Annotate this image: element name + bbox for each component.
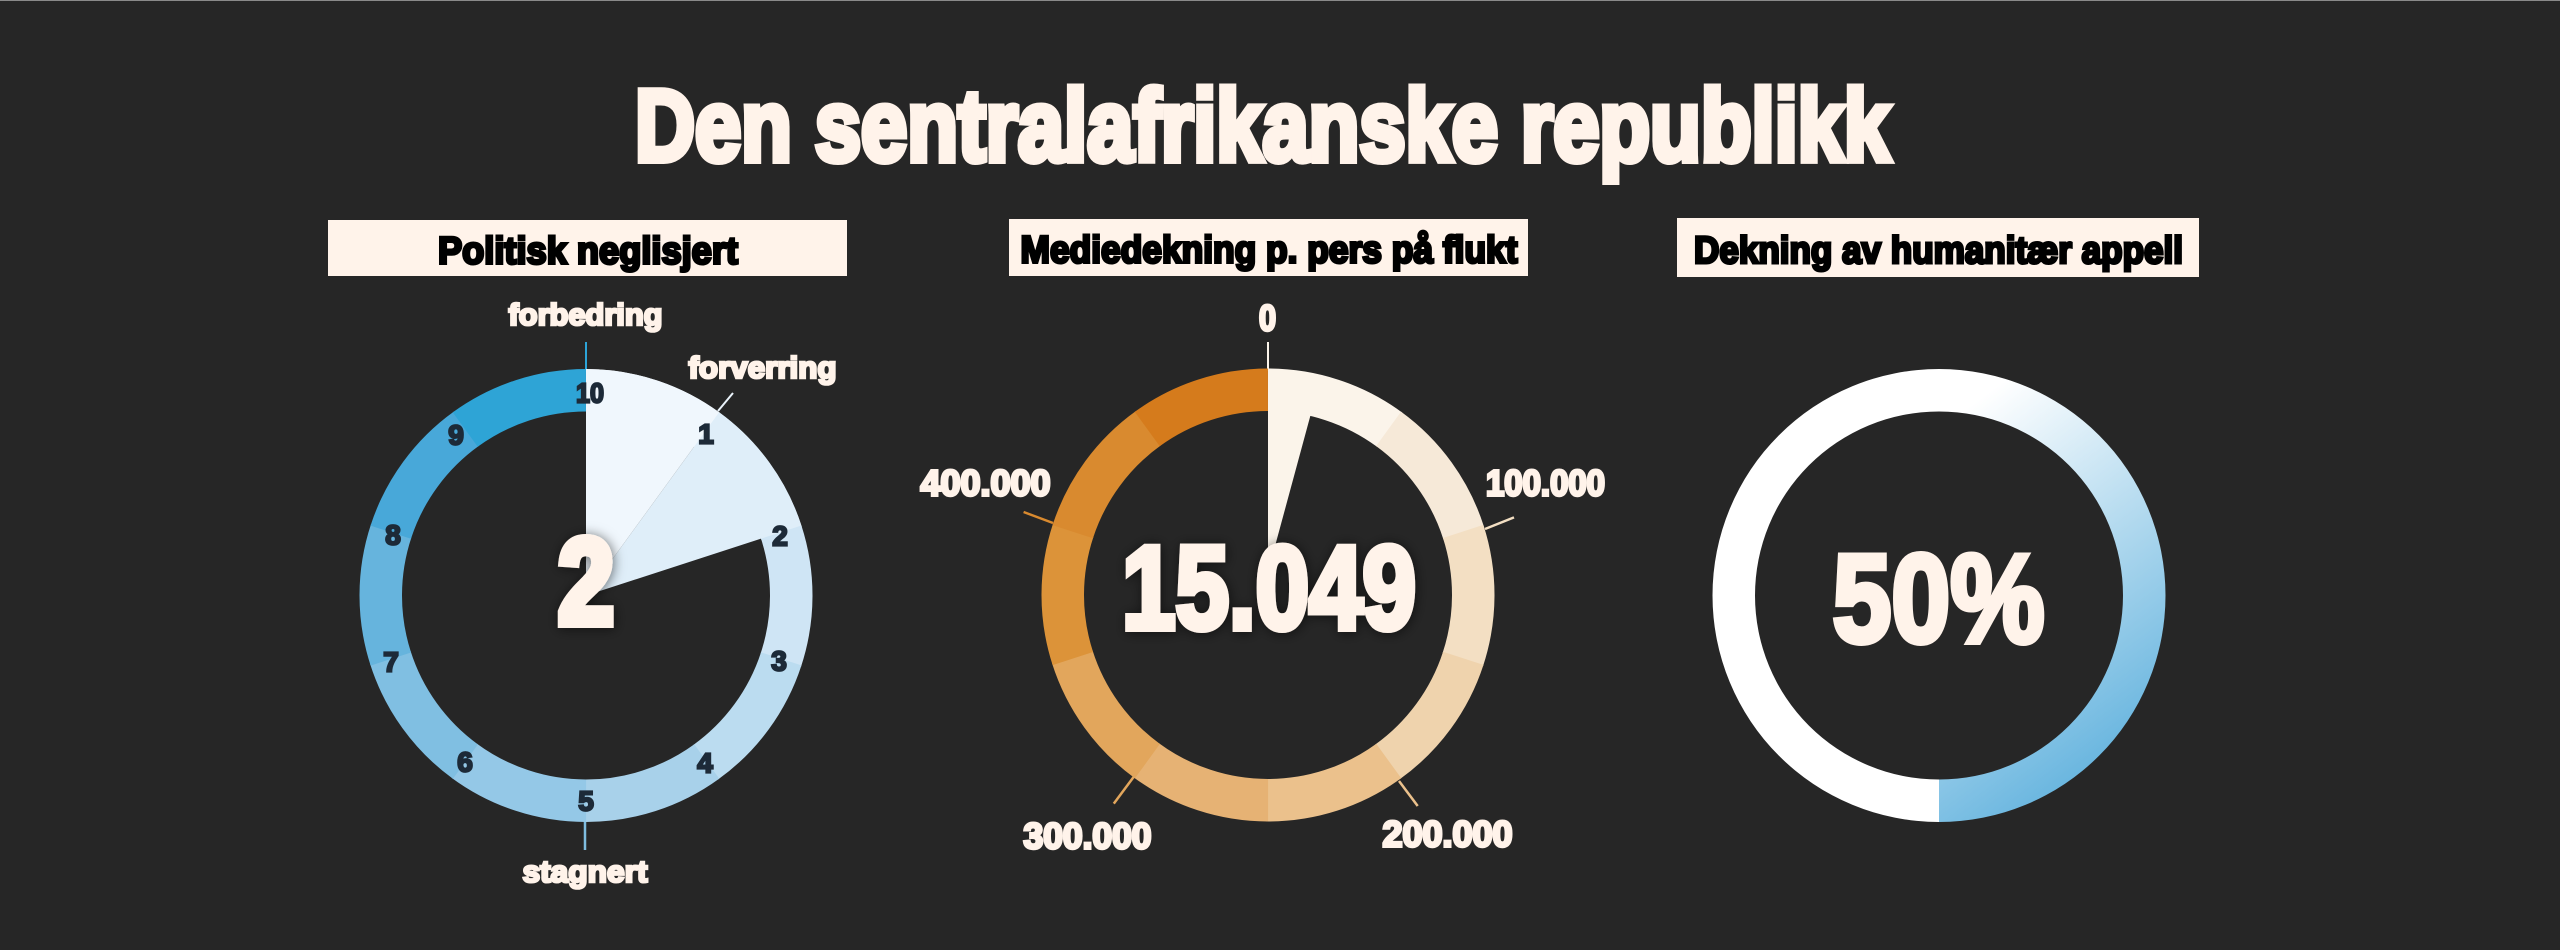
scale numbers: 1 <box>698 418 714 450</box>
donut chart: 50 percent <box>1712 369 2166 822</box>
label: forverring: forverring <box>688 350 836 385</box>
label: 300.000: 300.000 <box>1024 816 1152 856</box>
label: 0: 0 <box>1259 298 1276 338</box>
scale numbers: 6 <box>457 746 473 778</box>
scale numbers: 4 <box>697 748 713 778</box>
label: 400.000: 400.000 <box>920 462 1050 504</box>
scale numbers: 2 <box>772 520 788 552</box>
tick: 0 <box>1267 342 1269 371</box>
title: Den sentralafrikanske republikk <box>635 70 1891 182</box>
tick: 200.000 <box>1399 781 1418 806</box>
tick: 300.000 <box>1114 777 1134 804</box>
scale numbers: 3 <box>771 646 787 676</box>
scale numbers: 7 <box>383 646 399 678</box>
panel: humanitær appell <box>1677 218 2199 822</box>
tick: forverring <box>718 393 733 411</box>
label: 100.000: 100.000 <box>1486 462 1605 504</box>
tick: stagnert <box>584 820 586 850</box>
heading: humanitær appell <box>1677 218 2199 277</box>
tick: forbedring <box>585 342 587 372</box>
gauge ring: ten orange segments <box>981 308 1555 882</box>
scale numbers: 8 <box>385 520 401 550</box>
heading: mediedekning <box>1009 219 1528 276</box>
panel: politisk neglisjert <box>299 220 873 889</box>
label: 200.000: 200.000 <box>1382 814 1512 854</box>
scale numbers: 10 <box>576 378 604 408</box>
gauge ring: ten score segments <box>299 309 873 882</box>
heading: humanitær appell: Dekning av humanitær appell <box>1694 230 2183 272</box>
tick: 100.000 <box>1485 517 1514 529</box>
center value: 50%: 50% <box>1832 530 2044 669</box>
score wedge: 0 to 2 <box>586 369 801 596</box>
panel: mediedekning <box>920 219 1605 882</box>
scale numbers: 5 <box>578 786 594 816</box>
value wedge <box>1268 400 1310 572</box>
heading: mediedekning: Mediedekning p. pers på flukt <box>1020 230 1518 272</box>
heading: politisk neglisjert <box>328 220 847 276</box>
label: forbedring: forbedring <box>508 297 662 332</box>
scale numbers: 9 <box>448 420 464 450</box>
center value: 2: 2 <box>558 514 614 650</box>
scale numbers <box>383 378 788 816</box>
tick: 400.000 <box>1024 512 1053 523</box>
heading: politisk neglisjert: Politisk neglisjert <box>438 230 738 272</box>
label: stagnert: stagnert <box>522 854 648 889</box>
center value: 15.049: 15.049 <box>1122 522 1416 654</box>
